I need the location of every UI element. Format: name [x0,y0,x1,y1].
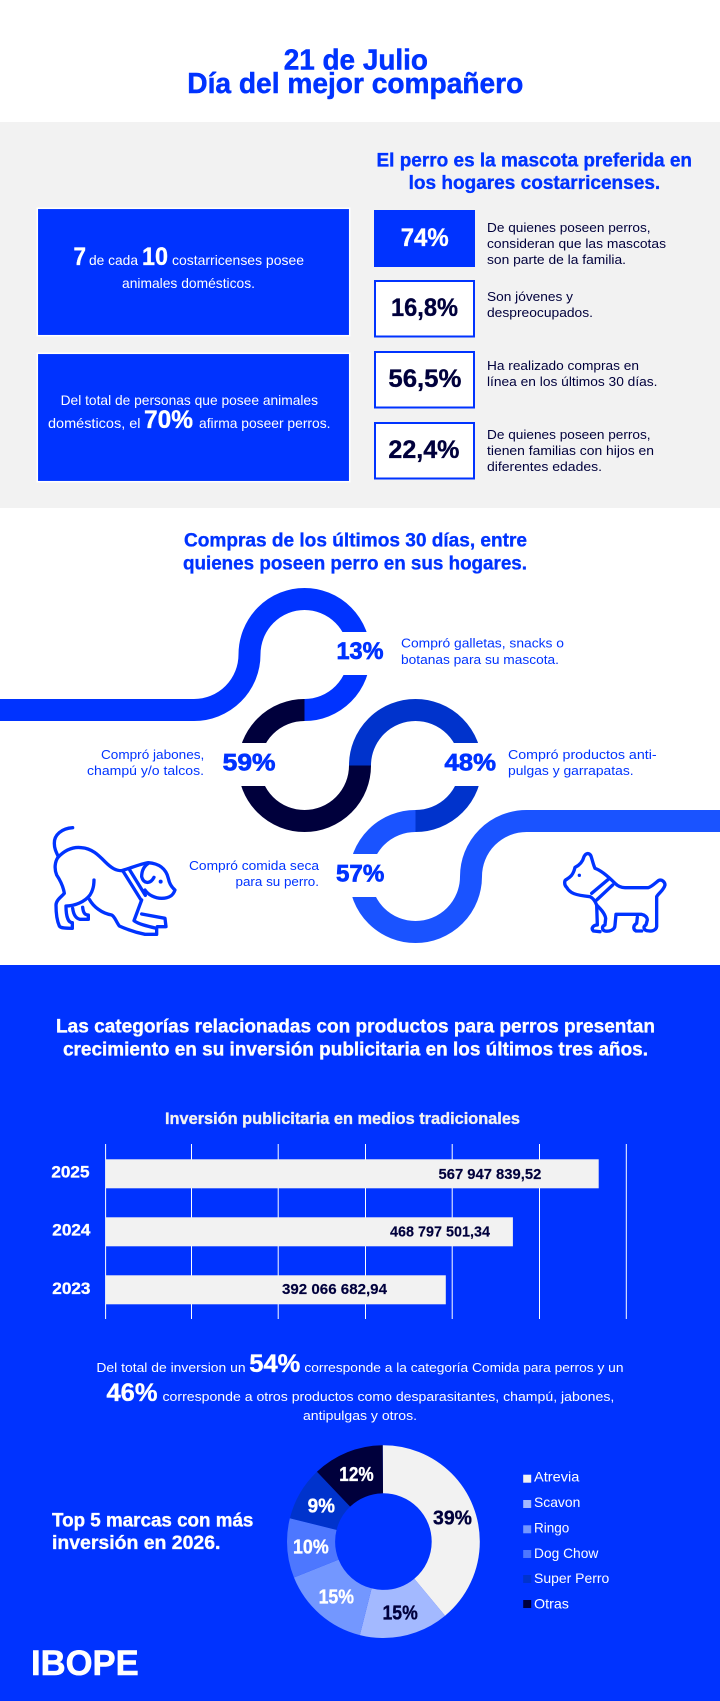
text block: 54% y 46%: antipulgas y otros. [303,1408,417,1423]
stat: 16,8%: 16,8% [391,294,458,322]
label: 13%: 13% [336,638,384,665]
text block: 54% y 46%: corresponde a otros productos como desparasitantes, champú, jabones, [162,1389,614,1404]
label: 57%: para su perro. [236,874,319,889]
label: 57% [189,858,384,889]
text block: 54% y 46%: 46% [106,1379,158,1407]
stat: 22,4% [375,423,654,478]
legend: Scavon [534,1494,580,1510]
heading: top 5 marcas: Top 5 marcas con más [52,1510,254,1532]
heading: compras: Compras de los últimos 30 días, entre [184,530,527,552]
stat: 56,5%: 56,5% [388,365,461,393]
callout: 7 de cada 10: costarricenses posee [172,252,304,268]
bar: 2024: 468 797 501,34 [390,1223,491,1240]
donut chart: marcas: 39% [433,1507,472,1529]
heading: perro mascota preferida [376,150,692,194]
stat: 74%: consideran que las mascotas [487,236,667,251]
label: 59% [87,747,276,778]
callout: 7 de cada 10: 7 [74,243,86,271]
logo: IBOPE: IBOPE [31,1644,139,1683]
legend [523,1469,610,1611]
heading: top 5 marcas: inversión en 2026. [52,1532,220,1554]
bar: 2024 [52,1217,513,1246]
stat: 56,5% [375,352,658,408]
stat: 16,8%: despreocupados. [487,305,593,320]
label: 48%: 48% [444,750,496,777]
bar: 2024: 2024 [52,1221,91,1240]
stat: 16,8% [375,281,593,336]
donut chart: marcas: 15% [319,1586,354,1608]
stat: 74%: De quienes poseen perros, [487,220,651,235]
callout: 70% poseer perros: domésticos, el [48,415,140,431]
stat: 22,4%: diferentes edades. [487,459,602,474]
stat: 22,4%: 22,4% [388,436,459,464]
text block: 54% y 46%: corresponde a la categoría Comida para perros y un [304,1360,624,1375]
stat: 74%: 74% [401,224,449,252]
callout: 70% poseer perros: Del total de personas que posee animales [61,392,318,408]
label: 59%: 59% [223,750,276,777]
heading: compras: quienes poseen perro en sus hogares. [183,552,527,574]
heading: categorías [56,1016,655,1060]
stat: 22,4%: tienen familias con hijos en [487,443,654,458]
callout: 7 de cada 10: de cada [89,252,138,268]
donut chart: marcas: 15% [382,1602,418,1624]
panel: inversión publicitaria [0,965,720,1701]
bar: 2023: 2023 [52,1279,90,1298]
label: 48% [444,747,657,778]
label: 13%: botanas para su mascota. [401,652,559,667]
title: Día del mejor compañero [187,68,523,100]
label: 48%: pulgas y garrapatas. [508,763,634,778]
donut chart: marcas: 10% [293,1536,329,1558]
bar: 2025: 567 947 839,52 [438,1166,541,1183]
heading: compras [183,530,527,574]
donut chart: marcas [293,1464,472,1624]
text block: 54% y 46%: Del total de inversion un [96,1360,246,1375]
stat: 74%: son parte de la familia. [487,252,626,267]
callout: 70% poseer perros: 70% [144,406,193,434]
bar: 2025: 2025 [51,1163,90,1182]
chart: serpentine percentages [0,599,720,932]
label: 13% [336,636,564,667]
panel: mascota preferida [0,122,720,508]
heading: categorías: Las categorías relacionadas con productos para perros presentan [56,1016,655,1038]
label: 59%: Compró jabones, [101,747,204,762]
label: 59%: champú y/o talcos. [87,763,204,778]
heading: perro mascota preferida: El perro es la mascota preferida en [376,150,692,172]
title [187,44,523,100]
bar chart: inversión en medios tradicionales [51,1109,626,1319]
label: 57%: Compró comida seca [189,858,320,873]
icon: playful dog [54,828,175,934]
text block: 54% y 46%: 54% [249,1350,300,1378]
icon: standing dog [565,854,665,932]
heading: top 5 marcas [52,1510,254,1554]
legend: Super Perro [534,1570,610,1586]
stat: 16,8%: Son jóvenes y [487,289,574,304]
title: 21 de Julio [284,44,428,76]
label: 48%: Compró productos anti- [508,747,657,762]
stat: 22,4%: De quienes poseen perros, [487,427,651,442]
bar: 2023 [52,1275,446,1304]
donut chart: marcas: 9% [308,1495,335,1517]
heading: perro mascota preferida: los hogares costarricenses. [409,172,660,194]
donut chart: marcas: 12% [339,1464,374,1486]
bar: 2025 [51,1159,599,1188]
label: 13%: Compró galletas, snacks o [401,636,564,651]
chart title: Inversión publicitaria en medios tradicionales [165,1109,520,1128]
legend: Dog Chow [534,1545,599,1561]
legend: Atrevia [534,1469,580,1485]
callout: 7 de cada 10: animales domésticos. [122,275,255,291]
label: 57%: 57% [336,861,384,888]
bar: 2023: 392 066 682,94 [282,1281,388,1298]
text block: 54% y 46% [96,1350,623,1423]
heading: categorías: crecimiento en su inversión publicitaria en los últimos tres años. [63,1038,648,1060]
legend: Otras [534,1595,569,1611]
callout: 70% poseer perros: afirma poseer perros. [199,415,330,431]
stat: 74% [374,210,667,267]
callout: 7 de cada 10 [37,208,350,336]
stat: 56,5%: línea en los últimos 30 días. [487,374,658,389]
stat: 56,5%: Ha realizado compras en [487,358,639,373]
callout: 7 de cada 10: 10 [142,243,168,271]
callout: 70% poseer perros [37,353,350,482]
legend: Ringo [534,1519,569,1535]
